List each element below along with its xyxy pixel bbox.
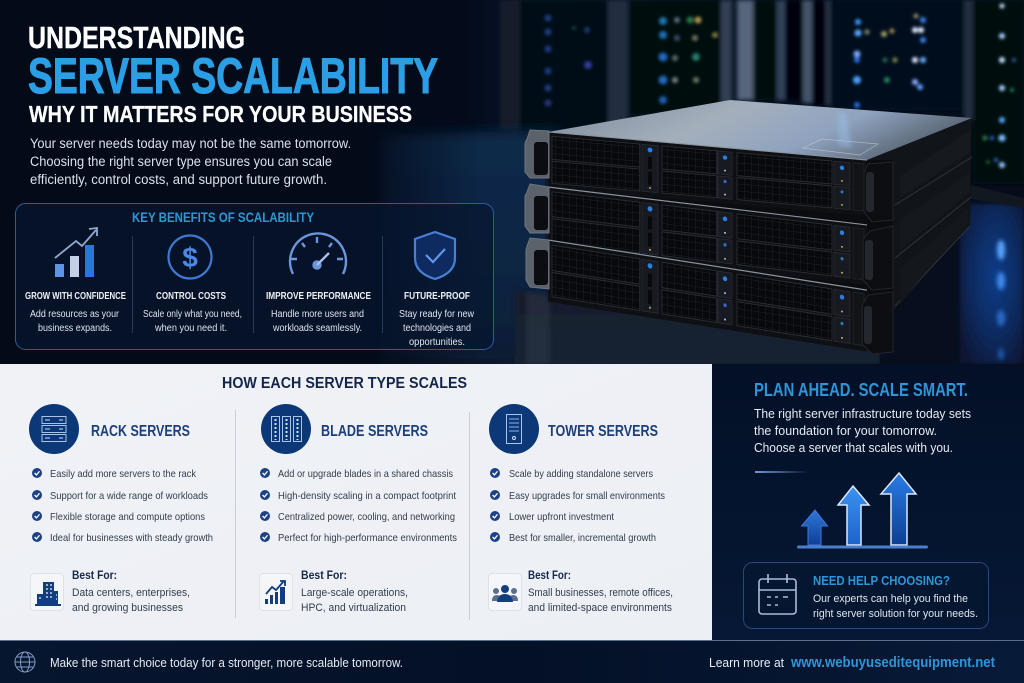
benefit: grow with confidence: business expands. xyxy=(38,323,112,334)
column: tower servers: TOWER SERVERS xyxy=(548,423,658,440)
blade best for xyxy=(260,570,408,614)
title: UNDERSTANDING xyxy=(28,20,245,55)
icon: dollar: $ xyxy=(182,242,198,273)
benefit: grow with confidence: Add resources as your xyxy=(30,309,120,320)
icon: calendar xyxy=(759,574,796,614)
tower features: Lower upfront investment xyxy=(509,511,614,523)
tower best for: and limited-space environments xyxy=(528,602,672,614)
panel: plan ahead xyxy=(712,364,1024,641)
blade features xyxy=(260,468,457,544)
benefit: future-proof: FUTURE-PROOF xyxy=(404,290,470,302)
intro text xyxy=(30,136,351,187)
callout: need help choosing: right server solution for your needs. xyxy=(813,608,978,620)
blade features: Centralized power, cooling, and networking xyxy=(278,511,455,523)
rack features: Flexible storage and compute options xyxy=(50,511,205,523)
icon: growth arrows xyxy=(797,473,928,548)
footer link xyxy=(709,654,995,671)
benefit: future-proof: technologies and xyxy=(403,323,471,334)
plan ahead heading: PLAN AHEAD. SCALE SMART. xyxy=(754,380,968,400)
icon: blade server xyxy=(261,404,311,454)
rack best for xyxy=(30,570,190,614)
blade features: High-density scaling in a compact footprint xyxy=(278,490,456,502)
footer message: Make the smart choice today for a stronger, more scalable tomorrow. xyxy=(50,655,403,670)
icon: rack server xyxy=(29,404,79,454)
tower best for: Best For: xyxy=(528,570,571,582)
rack best for: Data centers, enterprises, xyxy=(72,587,190,599)
benefit: improve performance: Handle more users and xyxy=(271,309,364,320)
footer link: www.webuyuseditequipment.net xyxy=(790,654,995,671)
plan ahead text: the foundation for your tomorrow. xyxy=(754,424,937,438)
benefits heading: KEY BENEFITS OF SCALABILITY xyxy=(132,210,314,225)
benefit: improve performance: workloads seamlessly. xyxy=(272,323,362,334)
hero background: data center xyxy=(0,0,1024,364)
icon: tower server xyxy=(489,404,539,454)
footer bar xyxy=(0,640,1024,683)
plan ahead text: Choose a server that scales with you. xyxy=(754,441,953,455)
footer link: Learn more at xyxy=(709,655,784,670)
reflection xyxy=(526,292,550,364)
benefit: grow with confidence: GROW WITH CONFIDENCE xyxy=(25,290,126,302)
benefit: improve performance xyxy=(266,290,371,334)
intro text: Choosing the right server type ensures you can scale xyxy=(30,154,332,169)
benefit: future-proof: Stay ready for new xyxy=(399,309,475,320)
benefit: control costs: Scale only what you need, xyxy=(143,309,242,320)
blade features: Perfect for high-performance environments xyxy=(278,532,457,544)
illustration: stacked rack servers xyxy=(525,100,972,364)
blade best for: HPC, and virtualization xyxy=(301,602,406,614)
floor xyxy=(380,130,560,364)
plan ahead text xyxy=(754,407,971,455)
intro text: efficiently, control costs, and support future growth. xyxy=(30,172,327,187)
column: blade servers: BLADE SERVERS xyxy=(321,423,428,440)
icon: globe xyxy=(15,652,35,672)
benefit: future-proof xyxy=(399,290,475,348)
plan ahead text: The right server infrastructure today sets xyxy=(754,407,971,421)
tower features: Best for smaller, incremental growth xyxy=(509,532,656,544)
benefit: future-proof: opportunities. xyxy=(409,337,465,348)
callout: need help choosing: Our experts can help you find the xyxy=(813,593,968,605)
tower best for: Small businesses, remote offices, xyxy=(528,587,673,599)
panel: how each server type scales xyxy=(0,364,712,641)
icon: dollar xyxy=(168,236,212,278)
column: tower servers xyxy=(488,404,673,614)
title: WHY IT MATTERS FOR YOUR BUSINESS xyxy=(29,101,412,127)
blade features: Add or upgrade blades in a shared chassis xyxy=(278,468,453,480)
column: rack servers xyxy=(29,404,213,614)
tower features xyxy=(490,468,665,544)
benefit: control costs: when you need it. xyxy=(154,323,227,334)
intro text: Your server needs today may not be the same tomorrow. xyxy=(30,136,351,151)
blade best for: Best For: xyxy=(301,570,347,582)
benefit: grow with confidence xyxy=(25,290,126,334)
column: rack servers: RACK SERVERS xyxy=(91,423,190,440)
rack features: Ideal for businesses with steady growth xyxy=(50,532,213,544)
benefit: control costs: CONTROL COSTS xyxy=(156,290,226,302)
rack best for: Best For: xyxy=(72,570,117,582)
icon: growth chart xyxy=(55,228,97,277)
benefit: improve performance: IMPROVE PERFORMANCE xyxy=(266,290,371,302)
icon: speedometer xyxy=(290,233,346,274)
benefit: control costs xyxy=(143,290,242,334)
tower best for xyxy=(488,570,673,614)
blade best for: Large-scale operations, xyxy=(301,587,408,599)
rack features xyxy=(32,468,213,544)
title xyxy=(28,20,438,127)
rack best for: and growing businesses xyxy=(72,602,183,614)
panel: key benefits of scalability xyxy=(16,204,494,350)
title: SERVER SCALABILITY xyxy=(28,48,438,104)
rack features: Support for a wide range of workloads xyxy=(50,490,208,502)
callout: need help choosing xyxy=(744,562,988,628)
callout: need help choosing: NEED HELP CHOOSING? xyxy=(813,573,950,588)
section heading: HOW EACH SERVER TYPE SCALES xyxy=(222,375,467,392)
tower features: Scale by adding standalone servers xyxy=(509,468,653,480)
icon: shield xyxy=(415,232,455,279)
tower features: Easy upgrades for small environments xyxy=(509,490,665,502)
server handles xyxy=(525,130,893,354)
column: blade servers xyxy=(260,404,457,614)
rack features: Easily add more servers to the rack xyxy=(50,468,197,480)
